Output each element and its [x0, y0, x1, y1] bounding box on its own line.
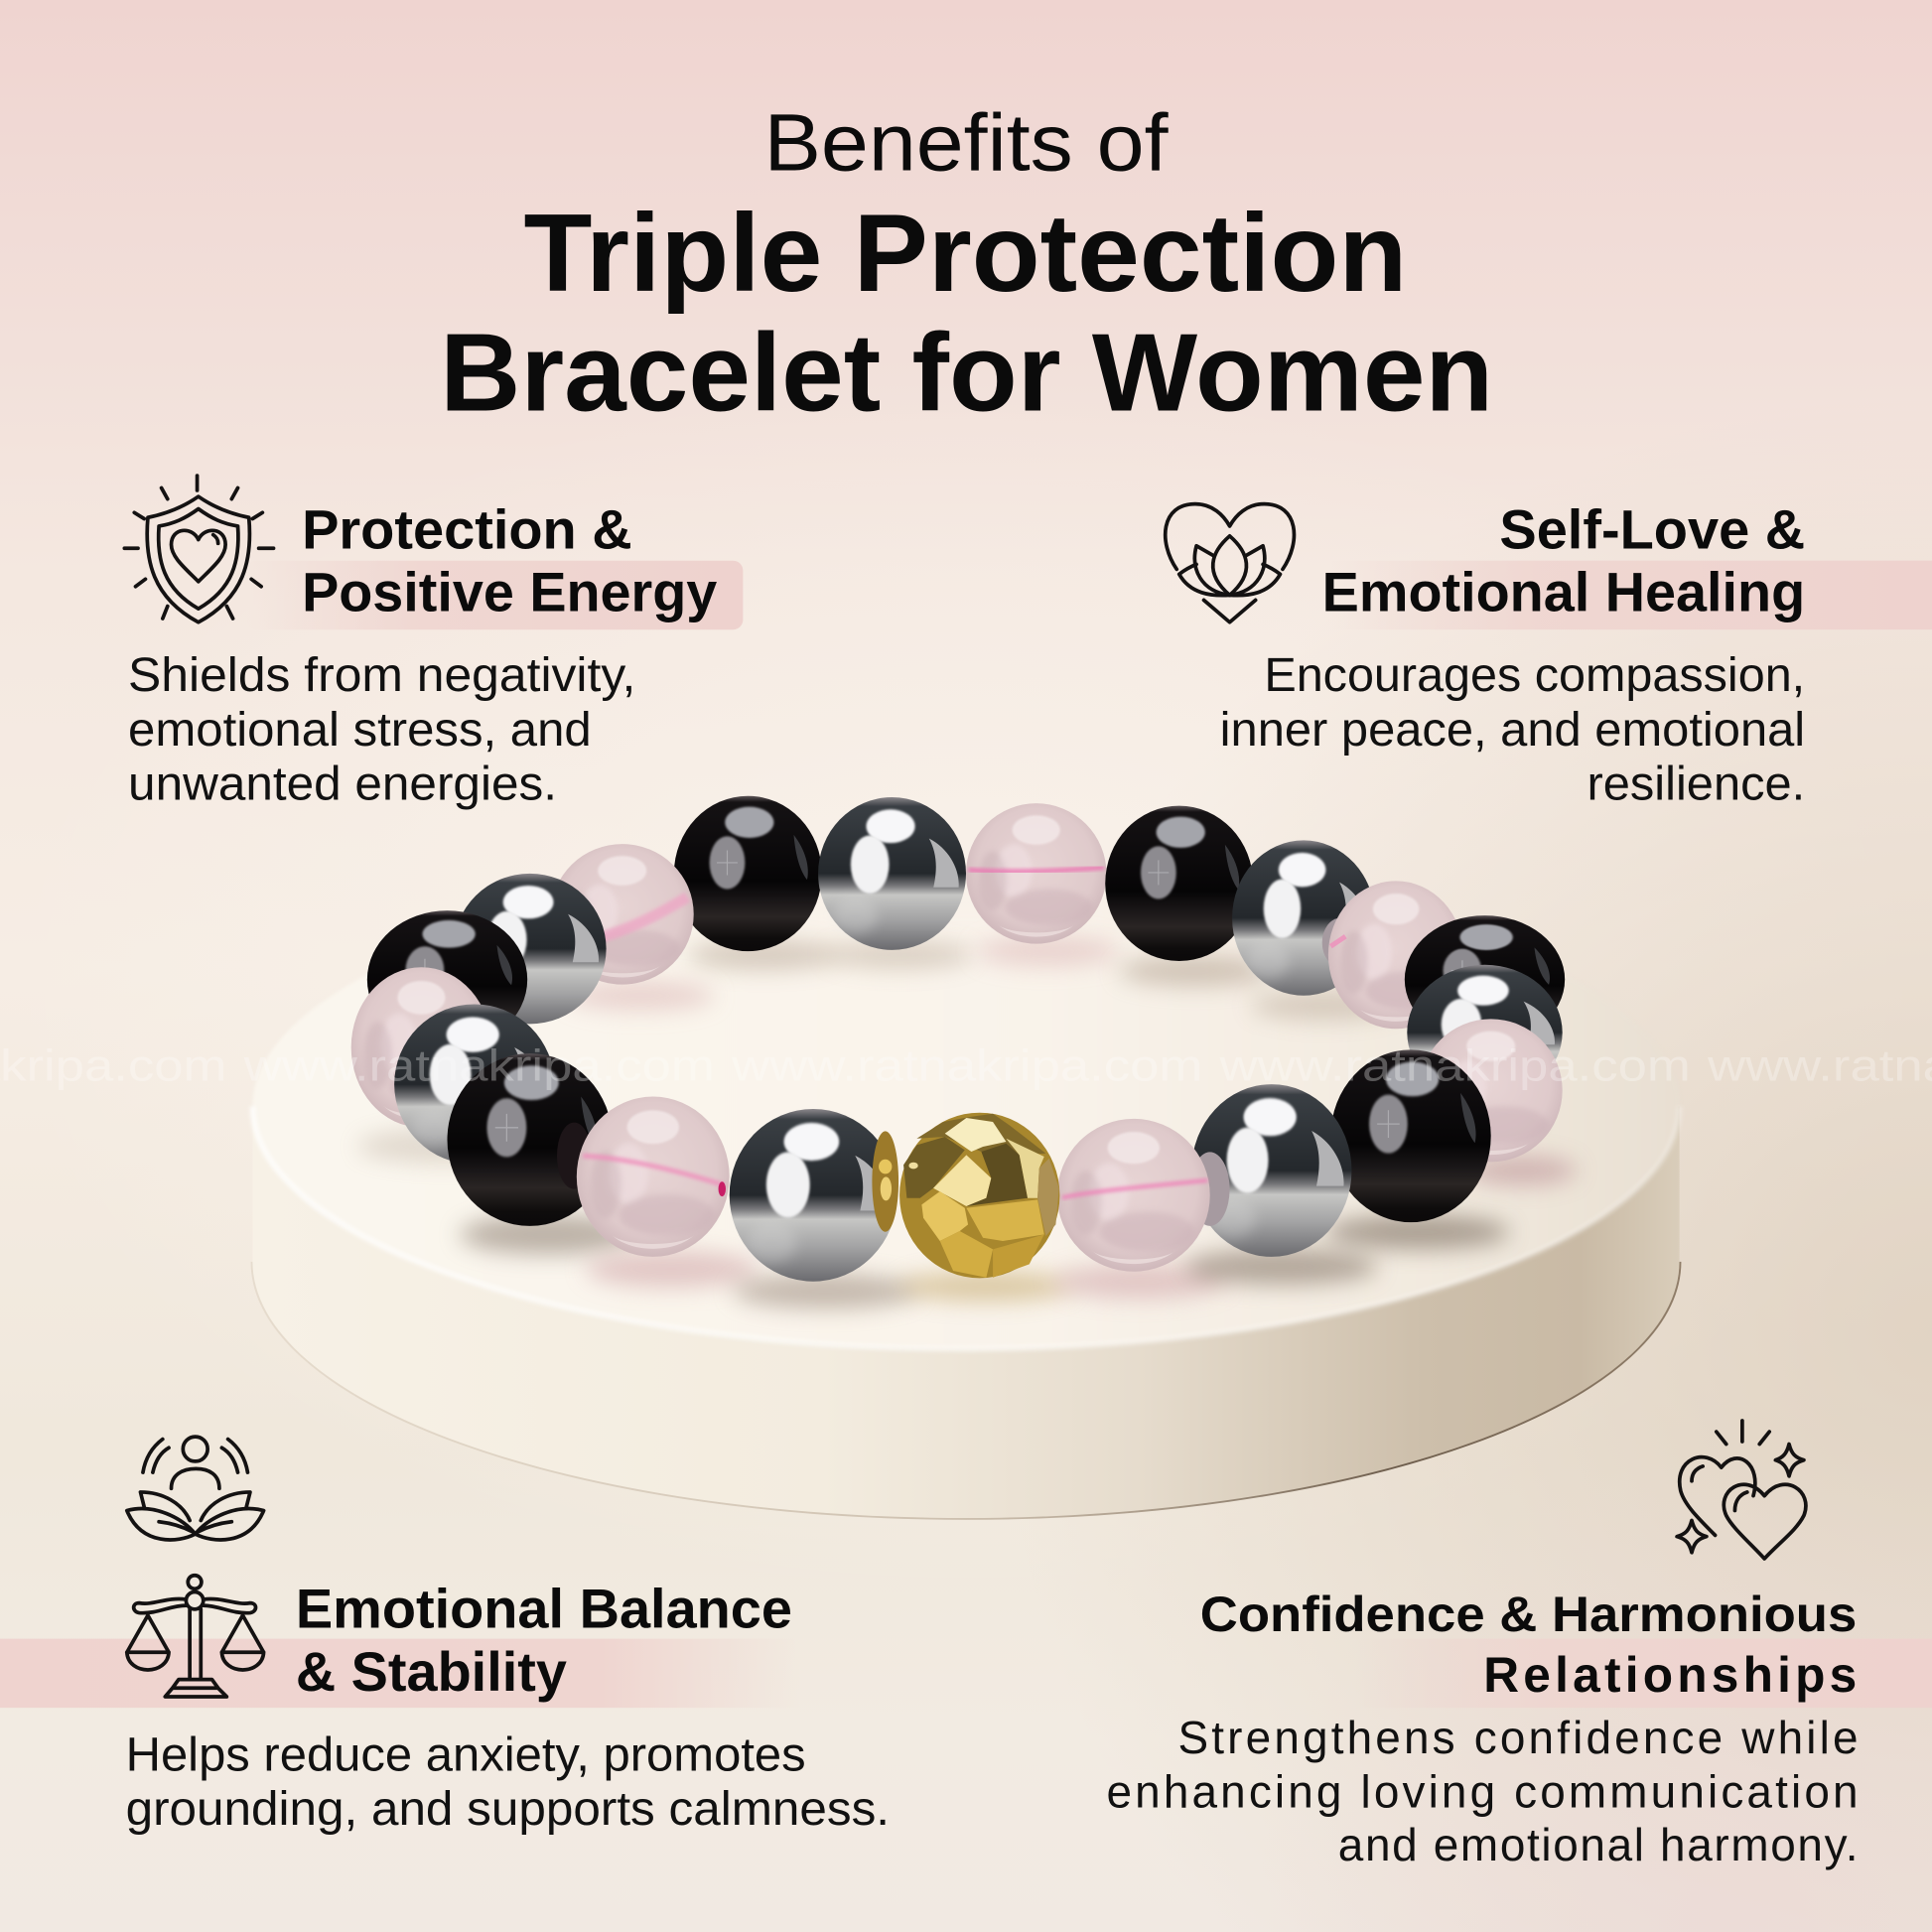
body text — [126, 1727, 890, 1836]
body text — [1106, 1712, 1859, 1870]
body text: Strengthens confidence while — [1177, 1712, 1859, 1763]
icon: two hearts with sparkles — [1677, 1421, 1806, 1559]
heading — [302, 497, 717, 623]
heading: Emotional Healing — [1322, 561, 1805, 623]
body text: inner peace, and emotional — [1220, 703, 1805, 757]
panel: self-love and emotional healing — [1166, 497, 1932, 810]
beads: front left — [557, 1097, 897, 1282]
heading: Positive Energy — [302, 561, 717, 623]
heading — [1200, 1587, 1857, 1703]
heading: Emotional Balance — [296, 1577, 792, 1639]
heading: Protection & — [302, 497, 632, 560]
heading: Self-Love & — [1499, 497, 1805, 560]
icon: shield with heart — [124, 476, 274, 622]
watermark — [0, 1041, 1932, 1090]
icon: balance scale — [127, 1576, 264, 1697]
highlight band — [1330, 561, 1932, 629]
body text: Helps reduce anxiety, promotes — [126, 1727, 806, 1781]
heading — [1322, 497, 1805, 623]
highlight band — [246, 561, 743, 629]
heading: & Stability — [296, 1640, 567, 1703]
icon: heart with lotus — [1166, 504, 1294, 622]
body text: grounding, and supports calmness. — [126, 1782, 890, 1836]
heading — [296, 1577, 792, 1703]
podium — [249, 979, 1682, 1520]
bracelet — [351, 796, 1578, 1309]
beads: back row — [351, 796, 1106, 1226]
watermark: www.ratnakripa.com — [731, 1041, 1202, 1090]
body text: enhancing loving communication — [1106, 1766, 1859, 1818]
heading: Confidence & Harmonious — [1200, 1587, 1857, 1642]
watermark: www.ratnakripa.com — [1218, 1041, 1691, 1090]
body text: emotional stress, and — [128, 703, 592, 757]
title — [440, 97, 1493, 434]
title: Bracelet for Women — [440, 310, 1493, 434]
body text — [128, 648, 635, 810]
icon: meditating figure on lotus — [127, 1437, 264, 1540]
highlight band — [1355, 1639, 1932, 1708]
body text: Encourages compassion, — [1264, 648, 1805, 702]
body text: resilience. — [1587, 757, 1805, 810]
body text: Shields from negativity, — [128, 648, 635, 702]
heading: Relationships — [1483, 1647, 1857, 1703]
title: Triple Protection — [523, 191, 1407, 315]
panel: emotional balance and stability — [0, 1437, 890, 1836]
highlight band — [0, 1639, 801, 1708]
title: Benefits of — [763, 97, 1169, 188]
panel: protection and positive energy — [124, 476, 743, 810]
beads: right side — [1057, 806, 1565, 1272]
bead shadows — [357, 936, 1578, 1309]
watermark: www.ratnakripa.com — [243, 1041, 715, 1090]
panel: confidence and harmonious relationships — [1106, 1421, 1932, 1870]
body text — [1220, 648, 1805, 810]
body text: and emotional harmony. — [1338, 1819, 1859, 1870]
body text: unwanted energies. — [128, 757, 557, 810]
gold bead with spacer — [872, 1113, 1059, 1278]
